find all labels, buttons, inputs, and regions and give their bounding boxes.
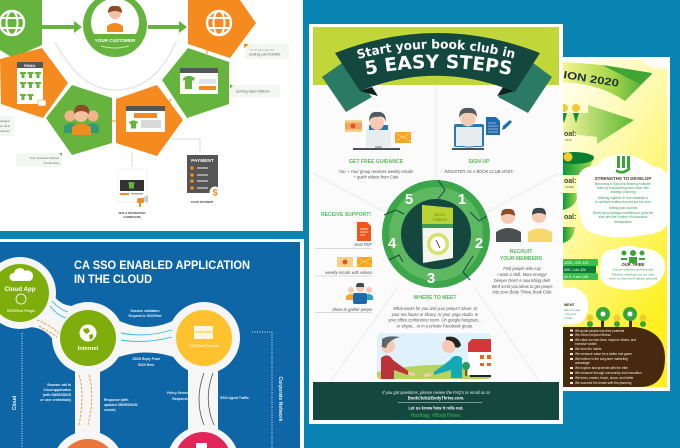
book cover bbox=[422, 205, 453, 263]
ribbon tails bbox=[322, 63, 552, 113]
flow line to payment bbox=[132, 139, 200, 167]
step: where to meet: or skype... or in a private Facebook group. bbox=[397, 324, 473, 328]
wheel numbers: 2 bbox=[475, 235, 483, 252]
icon: figures bbox=[616, 156, 630, 174]
step: sign up: REGISTER AS A BOOK CLUB HOST. bbox=[444, 169, 514, 174]
goal label 2: TRIBE bbox=[565, 185, 574, 189]
your customer badge bbox=[83, 0, 147, 57]
payment card: PAYMENT bbox=[191, 158, 214, 164]
bowl 2 bbox=[563, 193, 578, 210]
cloud: strengths to develop: Selling vast courses bbox=[609, 206, 638, 210]
title: CA SSO ENABLED APPLICATION bbox=[74, 260, 250, 272]
cloud: our tribe: seem to reach their highest potential bbox=[609, 276, 658, 280]
labels: cookie) bbox=[104, 408, 116, 412]
hexagon: email: EMAIL bbox=[24, 64, 37, 68]
step wheel bbox=[382, 180, 490, 288]
panel: CA SSO application bbox=[0, 239, 304, 448]
hexagon: email bbox=[0, 48, 68, 118]
labels: Session validation bbox=[131, 309, 159, 313]
cloud: our tribe: Top-tier wellness professionals bbox=[613, 268, 654, 272]
node: internet bbox=[60, 310, 116, 366]
goal label 3: oal: bbox=[564, 214, 576, 221]
banner: vision 2020: ION 2020 bbox=[563, 69, 620, 90]
hexagon: customers bbox=[46, 85, 112, 155]
labels: Request to SSO/Rest bbox=[129, 314, 162, 318]
node: orange bbox=[67, 439, 109, 448]
labels: Response (with bbox=[104, 398, 128, 402]
arrow: customer to orange bbox=[148, 21, 187, 33]
step: receive support: weekly emails with videos bbox=[325, 270, 372, 275]
wheel numbers: 4 bbox=[388, 235, 397, 252]
step: where to meet: What works for you and your peeps? Ideas: at bbox=[393, 306, 478, 311]
green goal list: 420K, LBD 42K bbox=[564, 261, 589, 265]
footer contact bar bbox=[313, 382, 559, 420]
callout: your url: Sunfrog.com/YOURID bbox=[249, 52, 281, 56]
green goal list bbox=[563, 259, 598, 280]
step: recruit members bbox=[491, 208, 553, 294]
cloud: strengths to develop: strategic planning bbox=[610, 190, 636, 194]
node: cloud app: SSO/Rest Plugin bbox=[7, 309, 35, 313]
marketing campaign card: ADS & MARKETING bbox=[118, 211, 146, 215]
cloud: strengths to develop: Developing strategic marketing to grow the bbox=[593, 211, 653, 215]
labels: Cloud application bbox=[43, 388, 71, 392]
cloud: strengths to develop: Becoming a Tight-Knit Binding multiplier bbox=[595, 182, 652, 186]
wheel numbers: 1 bbox=[458, 191, 466, 208]
step: get free guidance bbox=[339, 112, 413, 180]
book cover: THRIVE bbox=[433, 217, 448, 222]
brown list block: exercise wealth bbox=[575, 342, 597, 346]
cloud boundary: Cloud bbox=[12, 396, 18, 410]
callout: customer stored bbox=[16, 153, 62, 167]
icon: man in yellow shirt bbox=[528, 208, 552, 242]
connectors bbox=[21, 50, 207, 121]
cloud: commitment: MENT bbox=[564, 303, 575, 307]
panel: vision 2020 bbox=[554, 57, 670, 391]
cloud: our tribe: OUR TRIBE bbox=[621, 262, 645, 267]
your customer badge: YOUR CUSTOMER bbox=[95, 38, 136, 43]
arrows: gray agent traffic bbox=[199, 373, 214, 425]
brown list block: We explore and promote with the tribe bbox=[575, 366, 628, 370]
dividers bbox=[313, 85, 559, 382]
trophy figures bbox=[560, 104, 580, 123]
corporate network boundary: Corporate Network bbox=[277, 376, 283, 422]
node: red bbox=[178, 432, 228, 448]
bowl 3 bbox=[563, 227, 575, 243]
brown list block: We measure through community and innovation bbox=[575, 371, 642, 375]
labels: or user credentials) bbox=[40, 398, 71, 402]
node: cloud app: Cloud App bbox=[4, 286, 36, 293]
brown list block: We form the habits bbox=[575, 347, 602, 351]
title: IN THE CLOUD bbox=[74, 274, 152, 286]
wheel numbers bbox=[388, 191, 483, 287]
marketing campaign card: CAMPAIGNS bbox=[123, 215, 141, 219]
icon: tribe bbox=[621, 250, 645, 263]
icon: pen bbox=[502, 120, 512, 130]
bowl 1 bbox=[554, 152, 594, 175]
step: recruit members: Find people who say bbox=[503, 266, 542, 271]
ribbon banner bbox=[322, 33, 552, 113]
cloud: strengths to develop: to optimize entities that set the bar here bbox=[595, 200, 651, 204]
brown list block: We raise our own lives, improve others, and bbox=[575, 338, 636, 342]
payment card: YOUR PAYMENT bbox=[191, 200, 214, 204]
step: receive support: Host PDF bbox=[354, 242, 372, 247]
cloud: commitment bbox=[563, 287, 588, 325]
icon: document bbox=[486, 117, 500, 135]
brown list block bbox=[563, 327, 665, 387]
payment card: $ bbox=[212, 188, 218, 198]
step: where to meet: your office conference room. On google hangouts... bbox=[387, 318, 482, 322]
icon: envelope bbox=[357, 257, 372, 267]
step: sign up bbox=[444, 108, 514, 174]
step: where to meet bbox=[377, 295, 491, 379]
title line 1: Start your book club in bbox=[357, 39, 514, 58]
cloud boundary bbox=[12, 333, 22, 448]
callout: sales platform: Sunfrog Sales Platform bbox=[236, 90, 270, 94]
green goal list: 42 K, Earn 10K bbox=[564, 275, 589, 279]
brown list block: We learn, master, teach, share, and better bbox=[575, 376, 634, 380]
marketing campaign card bbox=[118, 169, 148, 219]
wheel segment lines bbox=[384, 180, 487, 280]
green arrow bbox=[563, 105, 634, 144]
callout: your url bbox=[244, 44, 289, 59]
hexagon: sales platform bbox=[162, 48, 229, 118]
title line 2: 5 EASY STEPS bbox=[366, 54, 512, 74]
goal label 2: oal: bbox=[564, 178, 576, 185]
brown list block: We succeed the tenets with the planning bbox=[575, 381, 632, 385]
step: recruit members: into your Body Thrive Book Club bbox=[493, 290, 552, 294]
wheel numbers: 3 bbox=[427, 270, 435, 287]
labels: (with SMSESSION bbox=[43, 393, 72, 397]
cloud: commitment: offer the way bbox=[564, 308, 581, 312]
step: recruit members: Deeper Rest! A nourishing diet! bbox=[494, 278, 551, 283]
icon: person at computer bbox=[353, 112, 400, 150]
icon: person at computer bbox=[452, 108, 484, 150]
step: get free guidance: GET FREE GUIDANCE bbox=[349, 159, 404, 165]
white network shape bbox=[0, 257, 240, 448]
step: recruit members: I want a shift. More energy! bbox=[497, 272, 548, 277]
step: get free guidance: You + Your group receives weekly emails bbox=[339, 169, 413, 174]
cloud: commitment: , live your bbox=[564, 312, 576, 316]
labels: SSO/ Agent Traffic bbox=[220, 396, 249, 400]
hexagon: orange globe bbox=[188, 0, 256, 58]
callout: customer stored: On Sunfrog bbox=[44, 161, 59, 165]
step: get free guidance: + quick videos from Cate bbox=[353, 174, 399, 180]
goal label 1 bbox=[564, 131, 576, 142]
title bbox=[74, 260, 250, 286]
cloud: strengths to develop: tribe and the number of successful bbox=[599, 215, 648, 219]
header background bbox=[313, 27, 559, 85]
step: where to meet: WHERE TO MEET bbox=[414, 295, 457, 301]
brown list block: advantage bbox=[575, 361, 590, 365]
callout: customer stored: Your Customer Stored bbox=[29, 156, 59, 160]
gray return arc bbox=[55, 42, 176, 90]
arrows: orange dashed top bbox=[37, 320, 59, 337]
footer contact bar: Hashtag: #BodyThrive. bbox=[411, 413, 461, 419]
icon: man in dark shirt bbox=[496, 209, 521, 242]
step: sign up: SIGN UP bbox=[469, 159, 490, 165]
step: receive support: RECEIVE SUPPORT! bbox=[321, 212, 371, 218]
cloud: our tribe: Effective meetings and our calls bbox=[612, 272, 655, 276]
labels: updated SMSESSION bbox=[104, 403, 138, 407]
icon: video card bbox=[345, 120, 362, 132]
step: where to meet: your tea house or library. At your yoga studio. In bbox=[391, 312, 479, 317]
cloud: strengths to develop: team by empowering each other with bbox=[597, 186, 649, 190]
icon: video card bbox=[337, 257, 353, 267]
book cover: BODY bbox=[434, 212, 446, 217]
node: internet: Internet bbox=[78, 346, 98, 352]
icon: pdf bbox=[357, 222, 371, 241]
callout: sales platform bbox=[230, 85, 280, 97]
callout: your url: YOUR SELLER URL bbox=[249, 48, 275, 52]
corporate network boundary bbox=[252, 332, 283, 448]
labels: Policy Server bbox=[167, 391, 189, 395]
handshake illustration bbox=[377, 333, 491, 379]
hexagon: product page bbox=[116, 85, 183, 156]
cloud: commitment: t Tribe. bbox=[564, 316, 573, 320]
green goal list: 65K, Lots 42k bbox=[564, 268, 586, 272]
hexagon: green globe bbox=[0, 0, 42, 58]
arrows: orange dashed vertical bbox=[79, 375, 92, 425]
cloud: strengths to develop: transactions bbox=[614, 220, 632, 224]
brown list block: We guide people into their potential bbox=[575, 329, 624, 333]
cloud: strengths to develop: Working together in one mandate to bbox=[598, 196, 649, 200]
banner: vision 2020 bbox=[563, 62, 652, 101]
icon: people bbox=[346, 283, 373, 304]
node: SSO rest: SSO/Rest (Tomcat) bbox=[189, 344, 219, 348]
footer contact bar: Let us know how it rolls out. bbox=[408, 406, 464, 410]
panel: customer sales funnel bbox=[0, 0, 303, 231]
cloud: strengths to develop: STRENGTHS TO DEVELOP bbox=[595, 176, 651, 181]
step: receive support bbox=[315, 212, 373, 312]
brown list block: We believe in the long-term marketing bbox=[575, 357, 628, 361]
payment card bbox=[187, 155, 220, 204]
goal label 2 bbox=[564, 178, 576, 189]
brown list block: We reform beyond fitness bbox=[575, 333, 611, 337]
ribbon body bbox=[335, 33, 540, 92]
icon: envelope bbox=[395, 132, 411, 143]
labels bbox=[40, 309, 249, 412]
node: SSO rest bbox=[176, 310, 232, 366]
arrows: cloud to internet bbox=[50, 301, 68, 318]
footer contact bar: If you got questions, please review the FAQ's or email us at bbox=[382, 390, 491, 395]
labels: JSON Reply From bbox=[132, 357, 160, 361]
step: recruit members: RECRUIT bbox=[510, 249, 533, 255]
footer contact bar: BookClub@BodyThrive.com. bbox=[408, 396, 464, 400]
cloud: our tribe bbox=[600, 246, 665, 290]
goal label 1: oal: bbox=[564, 131, 576, 138]
goal label 1: 2016 bbox=[565, 138, 572, 142]
trees and flowers bbox=[586, 307, 646, 330]
arrows: internet to SSO rest bbox=[121, 330, 172, 341]
top clouds bbox=[562, 60, 667, 68]
cloud: strengths to develop bbox=[577, 154, 668, 238]
brown list block: We measure value for a better end game bbox=[575, 352, 632, 356]
panel: book club steps bbox=[309, 24, 563, 424]
labels: Response bbox=[172, 397, 188, 401]
labels: Browser call to bbox=[47, 383, 71, 387]
step: recruit members: We'll send you ideas to get peeps bbox=[491, 284, 553, 289]
arrow: green to customer bbox=[42, 21, 82, 33]
step: recruit members: YOUR MEMBERS bbox=[500, 256, 543, 262]
callout: cut off note bbox=[0, 116, 14, 136]
step: receive support: Ideas to gather peeps bbox=[332, 307, 372, 312]
wheel numbers: 5 bbox=[405, 191, 413, 208]
labels: SSO/ Rest bbox=[138, 363, 155, 367]
node: cloud app bbox=[0, 264, 49, 322]
